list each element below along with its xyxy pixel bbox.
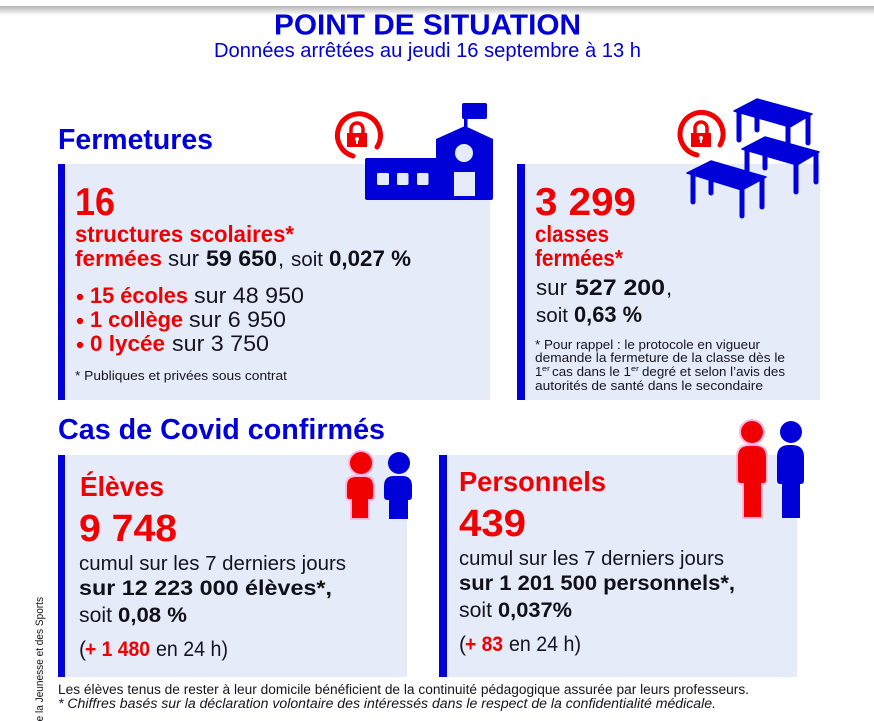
list: écoles, collège, lycée: sur 48 950 [194,283,304,308]
text: cumul personnels: sur 1 201 500 personnels*, [459,572,735,595]
label: classes fermées: fermées* [535,245,623,271]
icon: school building [365,103,493,200]
text: fermées sur 59 650: sur [168,246,199,271]
text: cumul personnels: cumul sur les 7 derniers jours [459,548,724,570]
footnote: rappel du protocole: er [631,364,640,373]
text: +83 en 24 h [459,633,581,656]
label: classes fermées: classes [535,221,609,247]
text: cumul élèves: soit [79,604,112,627]
text: +1 480 en 24 h: ( [79,638,86,661]
text: cumul personnels: 0,037% [498,599,572,622]
icon: two pupils [346,451,412,519]
list: écoles, collège, lycée [77,283,304,356]
label: structures scolaires: structures scolaires* [75,221,294,247]
text: sur 527 200 soit 0,63 % [536,275,672,327]
number: 439: 439 [459,503,526,545]
icon: two staff members [737,420,804,518]
footnote: publiques et privées: * Publiques et privées sous contrat [75,368,287,383]
text: cumul élèves [79,553,346,627]
panel: personnels [439,455,797,677]
list: écoles, collège, lycée: 0 lycée [90,331,165,356]
footer note: continuité pédagogique: Les élèves tenus de rester à leur domicile bénéficient de la continuité pédagogique assurée par leurs professeurs. [58,682,749,697]
footnote: rappel du protocole: er [542,364,551,373]
text: sur 527 200 soit 0,63 %: 0,63 % [574,302,642,327]
text: +83 en 24 h: ( [459,633,466,656]
subtitle: data date: Données arrêtées au jeudi 16 septembre à 13 h [214,40,641,62]
text: sur 527 200 soit 0,63 %: 527 200 [575,275,665,300]
text: sur 527 200 soit 0,63 %: sur [536,275,567,300]
panel: classes fermées [517,164,820,400]
title: POINT DE SITUATION [274,10,581,42]
text: sur 527 200 soit 0,63 %: , [666,275,672,300]
text: +1 480 en 24 h [79,638,228,661]
footnote: rappel du protocole: autorités de santé dans le secondaire [535,378,763,393]
text: fermées sur 59 650 [75,246,411,271]
icon: three school tables [687,99,819,216]
text: +1 480 en 24 h: en 24 h) [156,638,228,661]
footnote: rappel du protocole: 1 [535,364,542,379]
text: fermées sur 59 650: 59 650 [206,246,277,271]
panel: structures scolaires [58,164,490,400]
list: écoles, collège, lycée: sur 6 950 [189,307,286,332]
list: écoles, collège, lycée: sur 3 750 [172,331,269,356]
panel: élèves [58,455,407,677]
number: 3 299 classes: 3 299 [535,181,636,224]
heading: Fermetures: Fermetures [58,124,213,156]
number: 16 structures: 16 [75,181,115,224]
footnote: rappel du protocole: * Pour rappel : le protocole en vigueur [535,337,761,352]
footnote: rappel du protocole: degré et selon l’avis des [642,364,785,379]
heading: Élèves: Élèves [80,471,164,502]
footnote: rappel du protocole: cas dans le 1 [552,364,631,379]
text: fermées sur 59 650: , [278,246,284,271]
heading: Personnels: Personnels [459,466,606,497]
text: cumul personnels [459,548,735,622]
number: 9 748: 9 748 [79,508,177,550]
text: cumul élèves: 0,08 % [118,604,187,627]
text: sur 527 200 soit 0,63 %: soit [536,305,568,327]
list: écoles, collège, lycée: 1 collège [90,307,183,332]
footnote: rappel du protocole: demande la fermeture de la classe dès le [535,350,785,365]
label: classes fermées [535,221,623,271]
text: fermées sur 59 650: 0,027 % [329,246,411,271]
icon: red padlock (schools) [337,114,380,156]
text: +1 480 en 24 h: + 1 480 [85,638,150,661]
text: cumul élèves: cumul sur les 7 derniers jours [79,553,346,575]
text: cumul élèves: sur 12 223 000 élèves*, [79,577,332,600]
heading: Cas de Covid confirmés: Cas de Covid confirmés [58,414,385,446]
text: fermées sur 59 650: soit [291,249,323,271]
list: écoles, collège, lycée: 15 écoles [90,283,188,308]
footer note: chiffres déclaratifs: * Chiffres basés sur la déclaration volontaire des intéressés dans le respect de la confidentialité médicale. [58,696,716,711]
text: +83 en 24 h: en 24 h) [509,633,581,656]
text: fermées sur 59 650: fermées [75,246,162,271]
text: +83 en 24 h: + 83 [465,633,503,656]
icon: red padlock (classes) [680,112,723,155]
footnote: rappel du protocole [535,337,785,393]
text: cumul personnels: soit [459,599,492,622]
